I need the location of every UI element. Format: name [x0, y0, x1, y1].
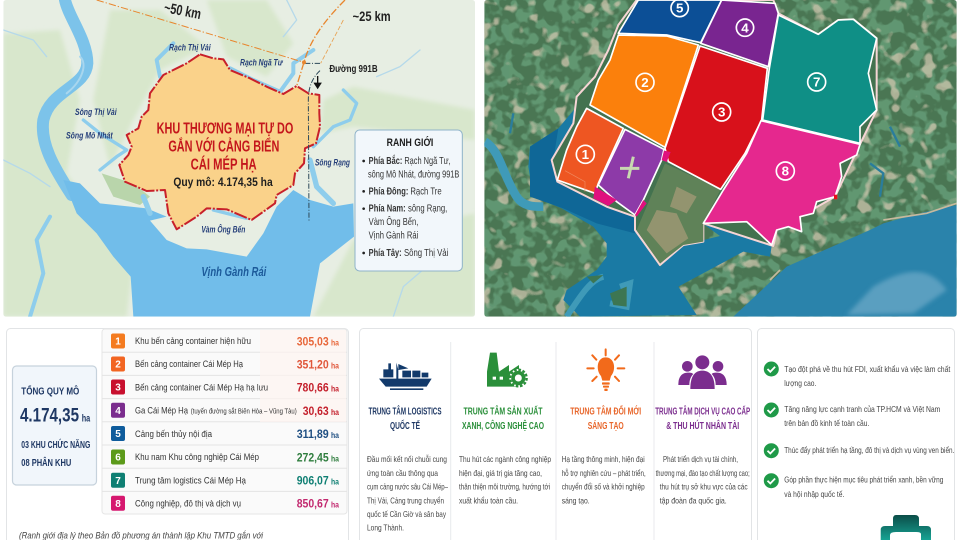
panel: satellite zoning map: 7 — [813, 75, 820, 90]
panel: area table — [6, 328, 348, 540]
benefit list — [784, 364, 954, 499]
row 8: 8 — [115, 499, 121, 510]
row 1: Khu bến cảng container hiện hữu — [135, 336, 251, 346]
heading: services: & THU HÚT NHÂN TÀI — [666, 419, 739, 432]
text: innovation: hỗ trợ nghiên cứu – phát triển, — [562, 468, 646, 478]
callout: boundaries: Sông Thị Vải — [404, 248, 448, 259]
row 5: 311,89 — [297, 427, 329, 441]
row 2 — [111, 356, 339, 372]
zone 1 — [557, 108, 623, 193]
callout: boundaries: Vịnh Gành Rái — [369, 231, 418, 242]
text: green manufacturing: hiện đại, giá trị gia tăng cao, — [459, 469, 542, 478]
site outline — [552, 0, 877, 265]
row 5 — [111, 426, 339, 441]
map labels: Rạch Thị Vải — [169, 43, 211, 53]
panel: satellite zoning map: 4 — [741, 20, 749, 35]
map title — [157, 120, 293, 189]
total area box: 03 KHU CHỨC NĂNG — [21, 438, 90, 451]
heading: innovation: TRUNG TÂM ĐỔI MỚI — [570, 404, 641, 418]
zone 7 — [763, 15, 877, 143]
zone 5 — [618, 0, 722, 43]
arrow: road 991B — [315, 76, 321, 88]
callout: boundaries: sông Mô Nhát, đường 991B — [368, 169, 459, 180]
total area box: 4.174,35 — [20, 406, 79, 426]
panel: satellite zoning map: 8 — [782, 164, 789, 179]
row 7: ha — [331, 477, 339, 487]
map labels: Rạch Ngã Tư — [240, 57, 284, 67]
row 7: Trung tâm logistics Cái Mép Hạ — [135, 475, 246, 485]
panel: location map — [3, 0, 475, 317]
zone list — [102, 329, 347, 514]
text: logistics — [367, 454, 448, 533]
river and bay water — [43, 0, 87, 195]
benefit list: và hội nhập quốc tế. — [784, 489, 844, 499]
text: logistics: ứng toàn cầu thông qua — [367, 469, 438, 478]
text: innovation: sáng tạo. — [562, 496, 590, 505]
row 5: 5 — [115, 429, 121, 440]
panel: satellite zoning map: 3 — [718, 105, 725, 120]
panel: benefits — [758, 328, 954, 540]
row 3: Bến cảng container Cái Mép Hạ hạ lưu — [135, 382, 268, 392]
row 3: ha — [331, 384, 339, 394]
heading: green manufacturing: TRUNG TÂM SẢN XUẤT — [464, 404, 543, 418]
text: logistics: Long Thành. — [367, 524, 404, 533]
distance lines — [97, 0, 345, 222]
zone numbers — [576, 0, 826, 180]
row 7: 7 — [115, 476, 121, 487]
map title: CÁI MÉP HẠ — [191, 157, 257, 174]
distance label 50 km: ~50 km — [163, 0, 202, 23]
map labels: Vịnh Gành Rái — [201, 265, 267, 279]
distance label 25 km: ~25 km — [353, 8, 391, 24]
row 2: 2 — [115, 360, 121, 370]
text: services: thu hút trụ sở khu vực của các — [660, 483, 748, 492]
row 3: 780,66 — [297, 381, 329, 395]
row 5: ha — [331, 430, 339, 440]
callout: boundaries: RANH GIỚI — [387, 136, 433, 149]
row 4: ha — [331, 407, 339, 417]
benefit list: trên bản đồ kinh tế toàn cầu. — [784, 418, 869, 428]
text: green manufacturing: xuất khẩu toàn cầu. — [459, 495, 518, 505]
road label: Đường 991B — [329, 64, 378, 75]
text: logistics: Thị Vải, Cảng trung chuyển — [367, 495, 444, 505]
text: services: Phát triển dịch vụ tài chính, — [663, 454, 738, 464]
row 1: 305,03 — [297, 334, 329, 348]
row 6: ha — [331, 454, 339, 464]
benefit list: lượng cao. — [784, 378, 816, 388]
icon: cargo ship — [379, 363, 432, 390]
row 7 — [111, 473, 339, 488]
panel: satellite zoning map: 2 — [641, 75, 649, 90]
heading: logistics: QUỐC TẾ — [390, 418, 420, 432]
heading: logistics — [368, 404, 442, 432]
row 6: 272,45 — [297, 450, 329, 464]
text: services: thương mại, đào tạo chất lượng cao; — [656, 469, 750, 478]
row 4 — [111, 403, 339, 418]
map labels: Vàm Ông Bến — [201, 223, 246, 234]
zone accents — [593, 187, 617, 206]
row 3: 3 — [115, 382, 121, 394]
callout: boundaries: sông Rạng, — [408, 204, 447, 215]
row 4: 4 — [115, 406, 121, 417]
total area box: TỔNG QUY MÔ — [21, 384, 79, 398]
row 6: 6 — [115, 452, 121, 464]
callout: boundaries: Phía Nam: — [369, 204, 406, 215]
icon: light bulb — [587, 349, 624, 391]
row 1 — [111, 334, 339, 348]
callout: boundaries: Phía Đông: — [369, 186, 408, 197]
row 6 — [111, 450, 339, 464]
text: services: tập đoàn đa quốc gia. — [660, 496, 727, 505]
panel: satellite zoning map: 1 — [582, 147, 590, 162]
callout: boundaries: Rạch Ngã Tư, — [404, 156, 451, 167]
map title: GẮN VỚI CẢNG BIỂN — [168, 138, 279, 156]
row 3 — [111, 380, 339, 395]
row 8: ha — [331, 500, 339, 510]
heading: logistics: TRUNG TÂM LOGISTICS — [368, 404, 442, 418]
heading: services: TRUNG TÂM DỊCH VỤ CAO CẤP — [655, 404, 750, 418]
text: innovation: Hạ tầng thông minh, hiện đại — [562, 455, 645, 464]
text: green manufacturing: thân thiện môi trường, hướng tới — [459, 483, 550, 492]
total area box: 08 PHÂN KHU — [21, 456, 71, 469]
text: innovation: chuyển đổi số và khởi nghiệp — [562, 482, 645, 492]
sea water — [528, 107, 772, 317]
panel: satellite zoning map: 5 — [676, 1, 684, 16]
callout: boundaries: Phía Bắc: — [369, 155, 402, 167]
row 2: ha — [331, 361, 339, 371]
zone 6 — [598, 129, 664, 215]
map title: KHU THƯƠNG MẠI TỰ DO — [157, 120, 293, 137]
row 8 — [111, 496, 339, 511]
map title: Quy mô: 4.174,35 ha — [173, 175, 273, 189]
row 2: Bến cảng container Cái Mép Hạ — [135, 359, 243, 369]
row 5: Cảng bến thủy nội địa — [135, 429, 212, 439]
row 1: 1 — [115, 336, 121, 348]
row 2: 351,20 — [297, 358, 329, 372]
panel: four functional centres — [360, 328, 752, 540]
zone 8 — [703, 121, 860, 245]
total area box — [12, 366, 96, 485]
heading: green manufacturing — [462, 404, 544, 432]
text: logistics: cụm cảng nước sâu Cái Mép– — [367, 483, 448, 492]
map labels: Sông Thị Vải — [75, 107, 117, 117]
text: logistics: quốc tế Cần Giờ và sân bay — [367, 510, 447, 519]
callout: boundaries: Rạch Tre — [410, 186, 442, 197]
check icons — [764, 362, 779, 488]
heading: innovation — [570, 404, 641, 432]
zone 4 — [701, 0, 778, 67]
text: services — [656, 454, 750, 505]
text: logistics: Đầu mối kết nối chuỗi cung — [367, 454, 447, 464]
row 1: ha — [331, 338, 339, 348]
icon: people — [678, 355, 727, 389]
free trade zone boundary — [119, 54, 320, 229]
text: innovation — [562, 455, 646, 505]
row 6: Khu nam Khu công nghiệp Cái Mép — [135, 452, 259, 462]
row 7: 906,07 — [297, 474, 329, 488]
icon: green factory — [487, 353, 527, 387]
row 4: Ga Cái Mép Hạ — [135, 405, 188, 415]
row 8: Công nghiệp, đô thị và dịch vụ — [135, 498, 241, 508]
callout: boundaries: Phía Tây: — [369, 248, 402, 259]
map labels: Sông Rạng — [315, 157, 350, 167]
heading: innovation: SÁNG TẠO — [588, 419, 624, 432]
logo — [881, 515, 931, 540]
text: green manufacturing — [459, 455, 551, 505]
total area box: ha — [82, 414, 91, 424]
heading: green manufacturing: XANH, CÔNG NGHỆ CAO — [462, 419, 544, 432]
zone 2 — [590, 35, 698, 147]
text: green manufacturing: Thu hút các ngành công nghiệp — [459, 455, 551, 464]
row 4: 30,63 — [303, 404, 329, 418]
callout: boundaries — [355, 130, 462, 271]
heading: services — [655, 404, 750, 432]
row 8: 850,67 — [297, 497, 329, 511]
map labels: Sông Mô Nhát — [66, 130, 113, 140]
zone 3 — [665, 46, 767, 189]
callout: boundaries: Vàm Ông Bến, — [369, 217, 418, 228]
panel: satellite zoning map — [484, 0, 957, 317]
row 4: (tuyến đường sắt Biên Hòa – Vũng Tàu) — [191, 406, 297, 415]
map labels — [66, 43, 350, 279]
